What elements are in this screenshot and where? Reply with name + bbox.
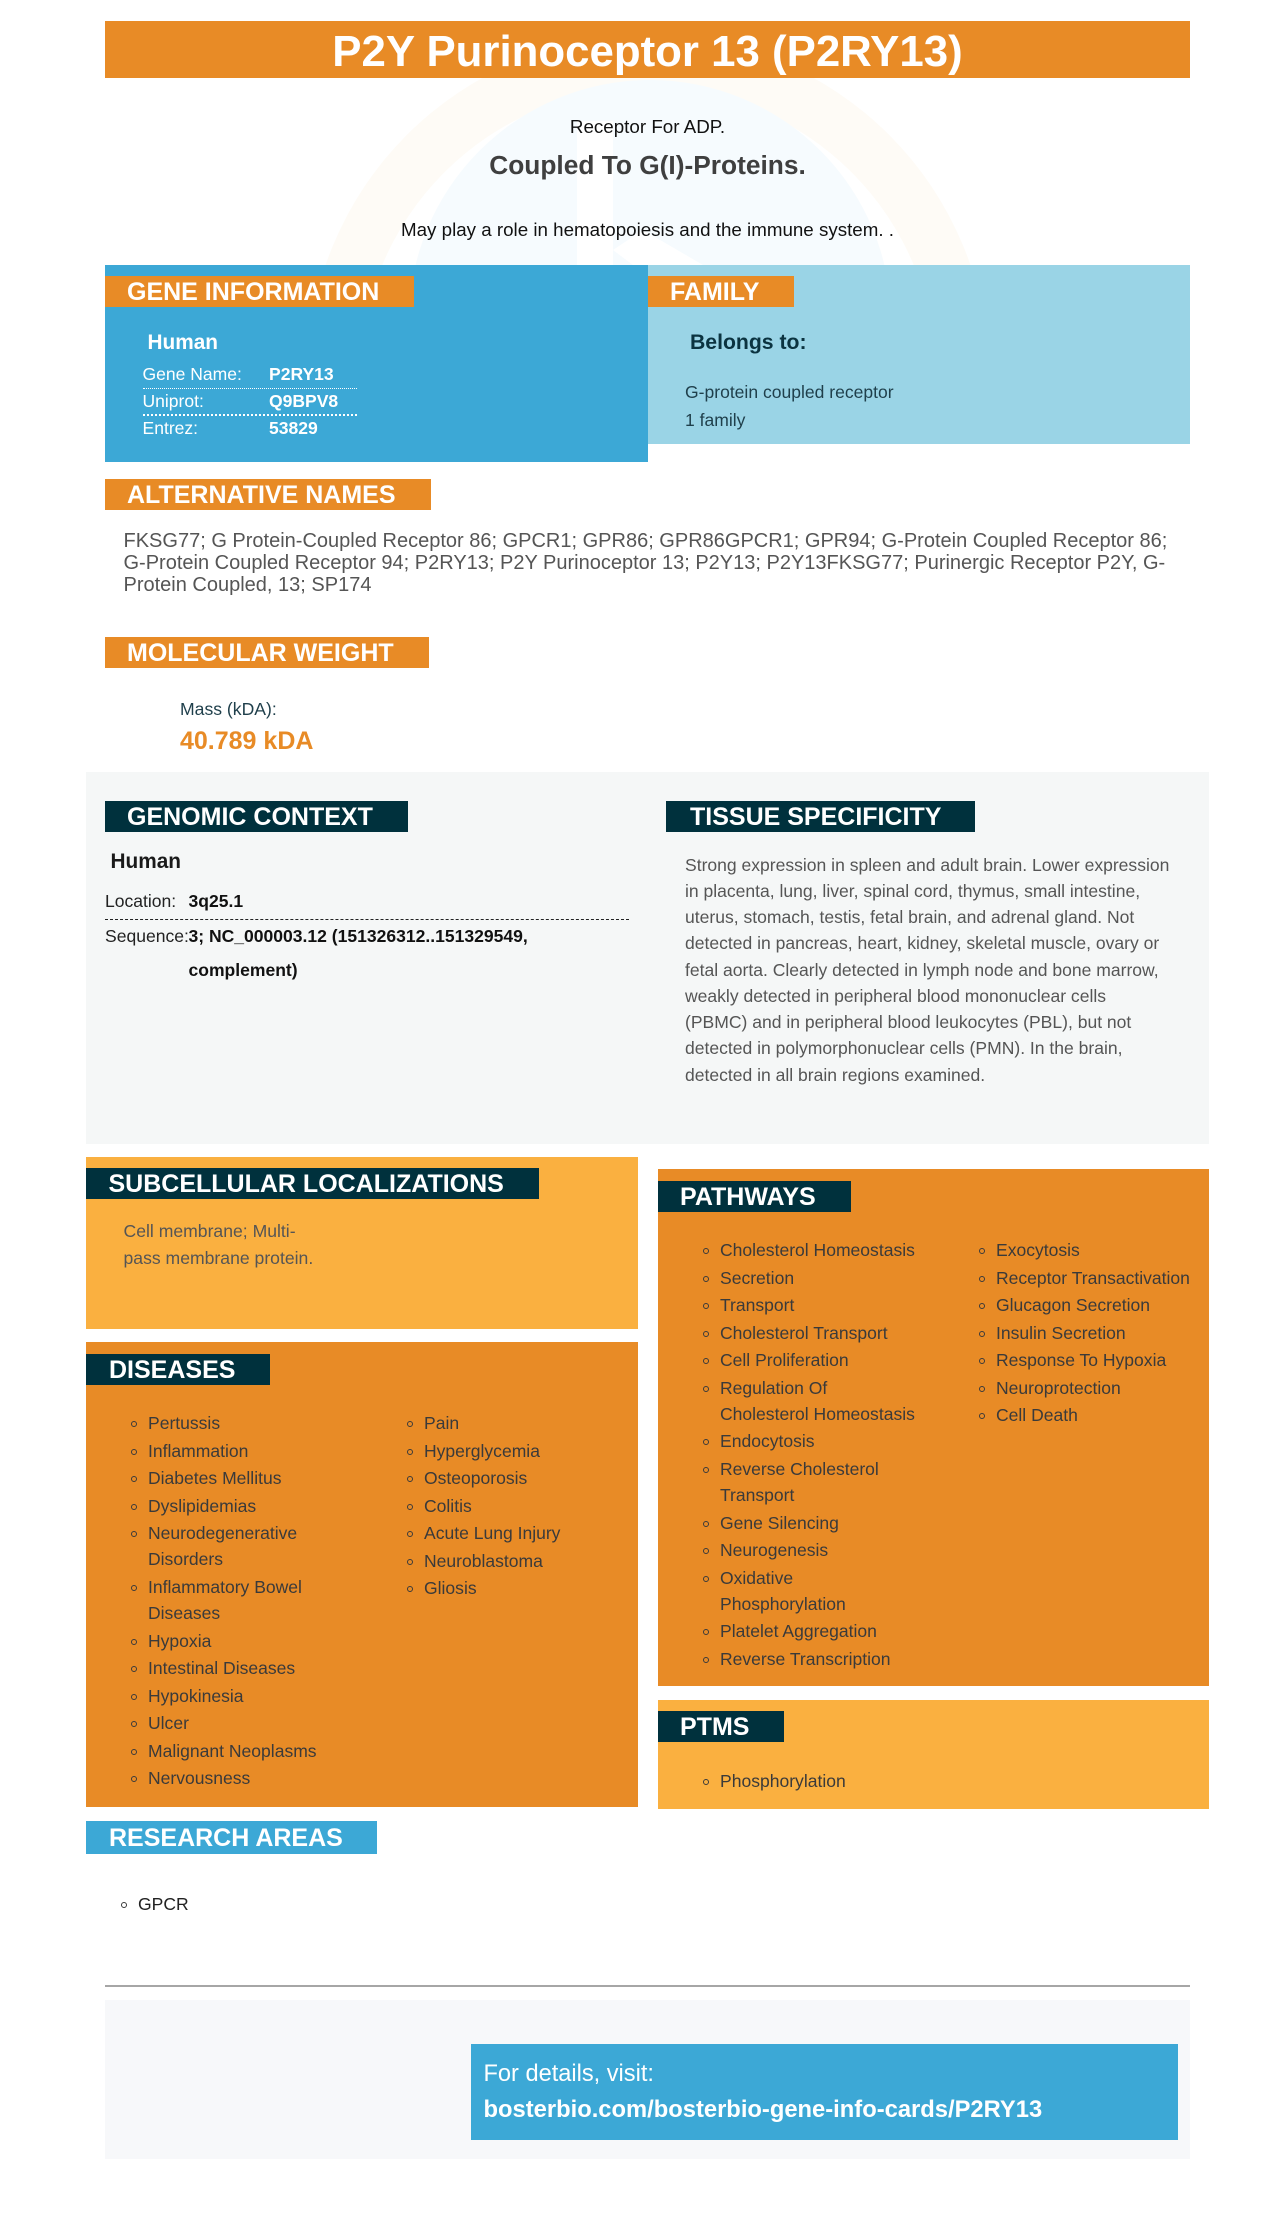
heading: genomic context: GENOMIC CONTEXT bbox=[127, 803, 373, 831]
tissue specificity text bbox=[685, 855, 1169, 1085]
sequence row: complement) bbox=[188, 960, 298, 980]
pathway list column 1: Reverse Cholesterol bbox=[720, 1459, 879, 1479]
logo watermark bbox=[326, 78, 970, 265]
pathway list column 1: Neurogenesis bbox=[720, 1540, 828, 1560]
pathway list column 2: Insulin Secretion bbox=[996, 1323, 1126, 1343]
panel: subcellular localizations bbox=[86, 1157, 638, 1329]
panel: PTMs bbox=[658, 1700, 1209, 1809]
localization text: Cell membrane; Multi- bbox=[124, 1221, 296, 1241]
location row: 3q25.1 bbox=[188, 891, 243, 911]
pathway list column 1: Reverse Transcription bbox=[720, 1649, 891, 1669]
tissue specificity text: (PBMC) and in peripheral blood leukocytes (PBL), but not bbox=[685, 1012, 1131, 1032]
pathway list column 2: Receptor Transactivation bbox=[996, 1268, 1190, 1288]
entrez row bbox=[142, 418, 318, 438]
gene name row: Gene Name: bbox=[142, 364, 242, 384]
pathway list column 2: Neuroprotection bbox=[996, 1378, 1121, 1398]
heading: research areas: RESEARCH AREAS bbox=[109, 1824, 343, 1852]
disease list column 1: Pertussis bbox=[148, 1413, 220, 1433]
heading: diseases: DISEASES bbox=[109, 1356, 235, 1384]
disease list column 1: Inflammation bbox=[148, 1441, 248, 1461]
pathway list column 2: Response To Hypoxia bbox=[996, 1350, 1166, 1370]
sequence row: 3; NC_000003.12 (151326312..151329549, bbox=[188, 926, 528, 946]
sequence row bbox=[105, 926, 528, 980]
sequence row: Sequence: bbox=[105, 926, 189, 946]
uniprot row bbox=[142, 391, 338, 411]
disease list column 1: Hypoxia bbox=[148, 1631, 211, 1651]
pathway list column 1: Phosphorylation bbox=[720, 1594, 846, 1614]
heading: family bbox=[648, 276, 794, 307]
tissue specificity text: detected in polymorphonuclear cells (PMN). In the brain, bbox=[685, 1038, 1123, 1058]
disease list column 1: Intestinal Diseases bbox=[148, 1658, 295, 1678]
title banner bbox=[105, 21, 1190, 78]
belongs to label: Belongs to: bbox=[690, 331, 807, 354]
alternative names text: G-Protein Coupled Receptor 94; P2RY13; P2Y Purinoceptor 13; P2Y13; P2Y13FKSG77; Purinergic Receptor P2Y, G- bbox=[124, 552, 1165, 574]
gene name row: P2RY13 bbox=[269, 364, 334, 384]
mass label: Mass (kDA): bbox=[180, 699, 277, 719]
panel: pathways bbox=[658, 1169, 1209, 1686]
uniprot row: Uniprot: bbox=[142, 391, 204, 411]
callout url: bosterbio.com/bosterbio-gene-info-cards/P2RY13 bbox=[484, 2096, 1042, 2123]
subtitle: coupled to G proteins: Coupled To G(I)-Proteins. bbox=[489, 150, 806, 180]
pathway list column 1: Transport bbox=[720, 1485, 794, 1505]
pathway list column 1: Cell Proliferation bbox=[720, 1350, 849, 1370]
pathway list column 1 bbox=[703, 1240, 915, 1669]
alternative names text bbox=[124, 530, 1167, 596]
pathway list column 1: Gene Silencing bbox=[720, 1513, 839, 1533]
species: Human bbox=[148, 331, 218, 354]
callout label: For details, visit: bbox=[484, 2061, 654, 2087]
pathway list column 1: Cholesterol Transport bbox=[720, 1323, 888, 1343]
uniprot row: Q9BPV8 bbox=[269, 391, 338, 411]
disease list column 1: Hypokinesia bbox=[148, 1686, 244, 1706]
footer panel bbox=[105, 2000, 1190, 2159]
callout: details link bbox=[471, 2044, 1178, 2140]
species: Human bbox=[110, 850, 181, 873]
heading: molecular weight: MOLECULAR WEIGHT bbox=[127, 639, 394, 667]
disease list column 2: Pain bbox=[424, 1413, 459, 1433]
disease list column 1: Malignant Neoplasms bbox=[148, 1741, 317, 1761]
tissue specificity text: weakly detected in peripheral blood mononuclear cells bbox=[685, 986, 1106, 1006]
pathway list column 1: Platelet Aggregation bbox=[720, 1621, 877, 1641]
pathway list column 2 bbox=[979, 1240, 1190, 1425]
disease list column 2: Osteoporosis bbox=[424, 1468, 527, 1488]
panel: diseases bbox=[86, 1342, 638, 1807]
disease list column 1: Diseases bbox=[148, 1603, 220, 1623]
research areas list: GPCR bbox=[138, 1894, 189, 1914]
disease list column 1: Disorders bbox=[148, 1549, 223, 1569]
heading: PTMs bbox=[658, 1711, 784, 1742]
panel: gene information bbox=[105, 265, 648, 462]
tissue specificity text: Strong expression in spleen and adult brain. Lower expression bbox=[685, 855, 1169, 875]
pathway list column 1: Transport bbox=[720, 1295, 794, 1315]
family text bbox=[685, 382, 894, 430]
disease list column 2 bbox=[407, 1413, 560, 1598]
tissue specificity text: fetal aorta. Clearly detected in lymph node and bone marrow, bbox=[685, 960, 1159, 980]
tissue specificity text: detected in pancreas, heart, kidney, skeletal muscle, ovary or bbox=[685, 933, 1159, 953]
disease list column 2: Acute Lung Injury bbox=[424, 1523, 560, 1543]
disease list column 2: Gliosis bbox=[424, 1578, 477, 1598]
heading: PTMs: PTMS bbox=[680, 1713, 749, 1741]
pathway list column 1: Cholesterol Homeostasis bbox=[720, 1240, 915, 1260]
localization text: pass membrane protein. bbox=[124, 1248, 313, 1268]
disease list column 1: Ulcer bbox=[148, 1713, 189, 1733]
heading: family: FAMILY bbox=[670, 278, 759, 306]
PTM list: Phosphorylation bbox=[720, 1771, 846, 1791]
title banner: P2Y Purinoceptor 13 (P2RY13) bbox=[332, 27, 963, 76]
function summary: May play a role in hematopoiesis and the immune system. . bbox=[401, 219, 894, 240]
heading: pathways: PATHWAYS bbox=[680, 1183, 816, 1211]
disease list column 1: Neurodegenerative bbox=[148, 1523, 297, 1543]
heading: pathways bbox=[658, 1181, 851, 1212]
pathway list column 1: Cholesterol Homeostasis bbox=[720, 1404, 915, 1424]
entrez row: Entrez: bbox=[142, 418, 198, 438]
pathway list column 1: Secretion bbox=[720, 1268, 794, 1288]
gene name row bbox=[142, 364, 334, 384]
pathway list column 2: Exocytosis bbox=[996, 1240, 1080, 1260]
entrez row: 53829 bbox=[269, 418, 318, 438]
location row: Location: bbox=[105, 891, 176, 911]
disease list column 1: Diabetes Mellitus bbox=[148, 1468, 282, 1488]
disease list column 1: Nervousness bbox=[148, 1768, 250, 1788]
disease list column 2: Colitis bbox=[424, 1496, 472, 1516]
mass value: 40.789 kDA bbox=[180, 727, 313, 755]
localization text bbox=[124, 1221, 313, 1268]
tissue specificity text: uterus, stomach, testis, fetal brain, and adrenal gland. Not bbox=[685, 907, 1134, 927]
disease list column 2: Neuroblastoma bbox=[424, 1551, 543, 1571]
pathway list column 1: Endocytosis bbox=[720, 1431, 815, 1451]
heading: alternative names: ALTERNATIVE NAMES bbox=[127, 481, 396, 509]
alternative names text: Protein Coupled, 13; SP174 bbox=[124, 574, 371, 596]
family text: 1 family bbox=[685, 410, 745, 430]
heading: research areas bbox=[86, 1821, 377, 1854]
disease list column 1: Dyslipidemias bbox=[148, 1496, 256, 1516]
tissue specificity text: detected in all brain regions examined. bbox=[685, 1065, 985, 1085]
panel: family bbox=[648, 265, 1190, 444]
disease list column 2: Hyperglycemia bbox=[424, 1441, 540, 1461]
heading: subcellular localizations: SUBCELLULAR LOCALIZATIONS bbox=[108, 1170, 504, 1198]
pathway list column 1: Oxidative bbox=[720, 1568, 793, 1588]
heading: tissue specificity: TISSUE SPECIFICITY bbox=[690, 803, 941, 831]
disease list column 1 bbox=[131, 1413, 317, 1788]
family text: G-protein coupled receptor bbox=[685, 382, 894, 402]
location row bbox=[105, 891, 243, 911]
disease list column 1: Inflammatory Bowel bbox=[148, 1577, 302, 1597]
tissue specificity text: in placenta, lung, liver, spinal cord, thymus, small intestine, bbox=[685, 881, 1140, 901]
alternative names text: FKSG77; G Protein-Coupled Receptor 86; GPCR1; GPR86; GPR86GPCR1; GPR94; G-Protein Coupled Receptor 86; bbox=[124, 530, 1167, 552]
panel: genomic context and tissue specificity bbox=[86, 772, 1209, 1144]
heading: diseases bbox=[86, 1354, 270, 1385]
subtitle: receptor for ADP: Receptor For ADP. bbox=[570, 116, 725, 137]
pathway list column 2: Glucagon Secretion bbox=[996, 1295, 1150, 1315]
pathway list column 1: Regulation Of bbox=[720, 1378, 827, 1398]
pathway list column 2: Cell Death bbox=[996, 1405, 1078, 1425]
heading: gene information: GENE INFORMATION bbox=[127, 278, 379, 306]
